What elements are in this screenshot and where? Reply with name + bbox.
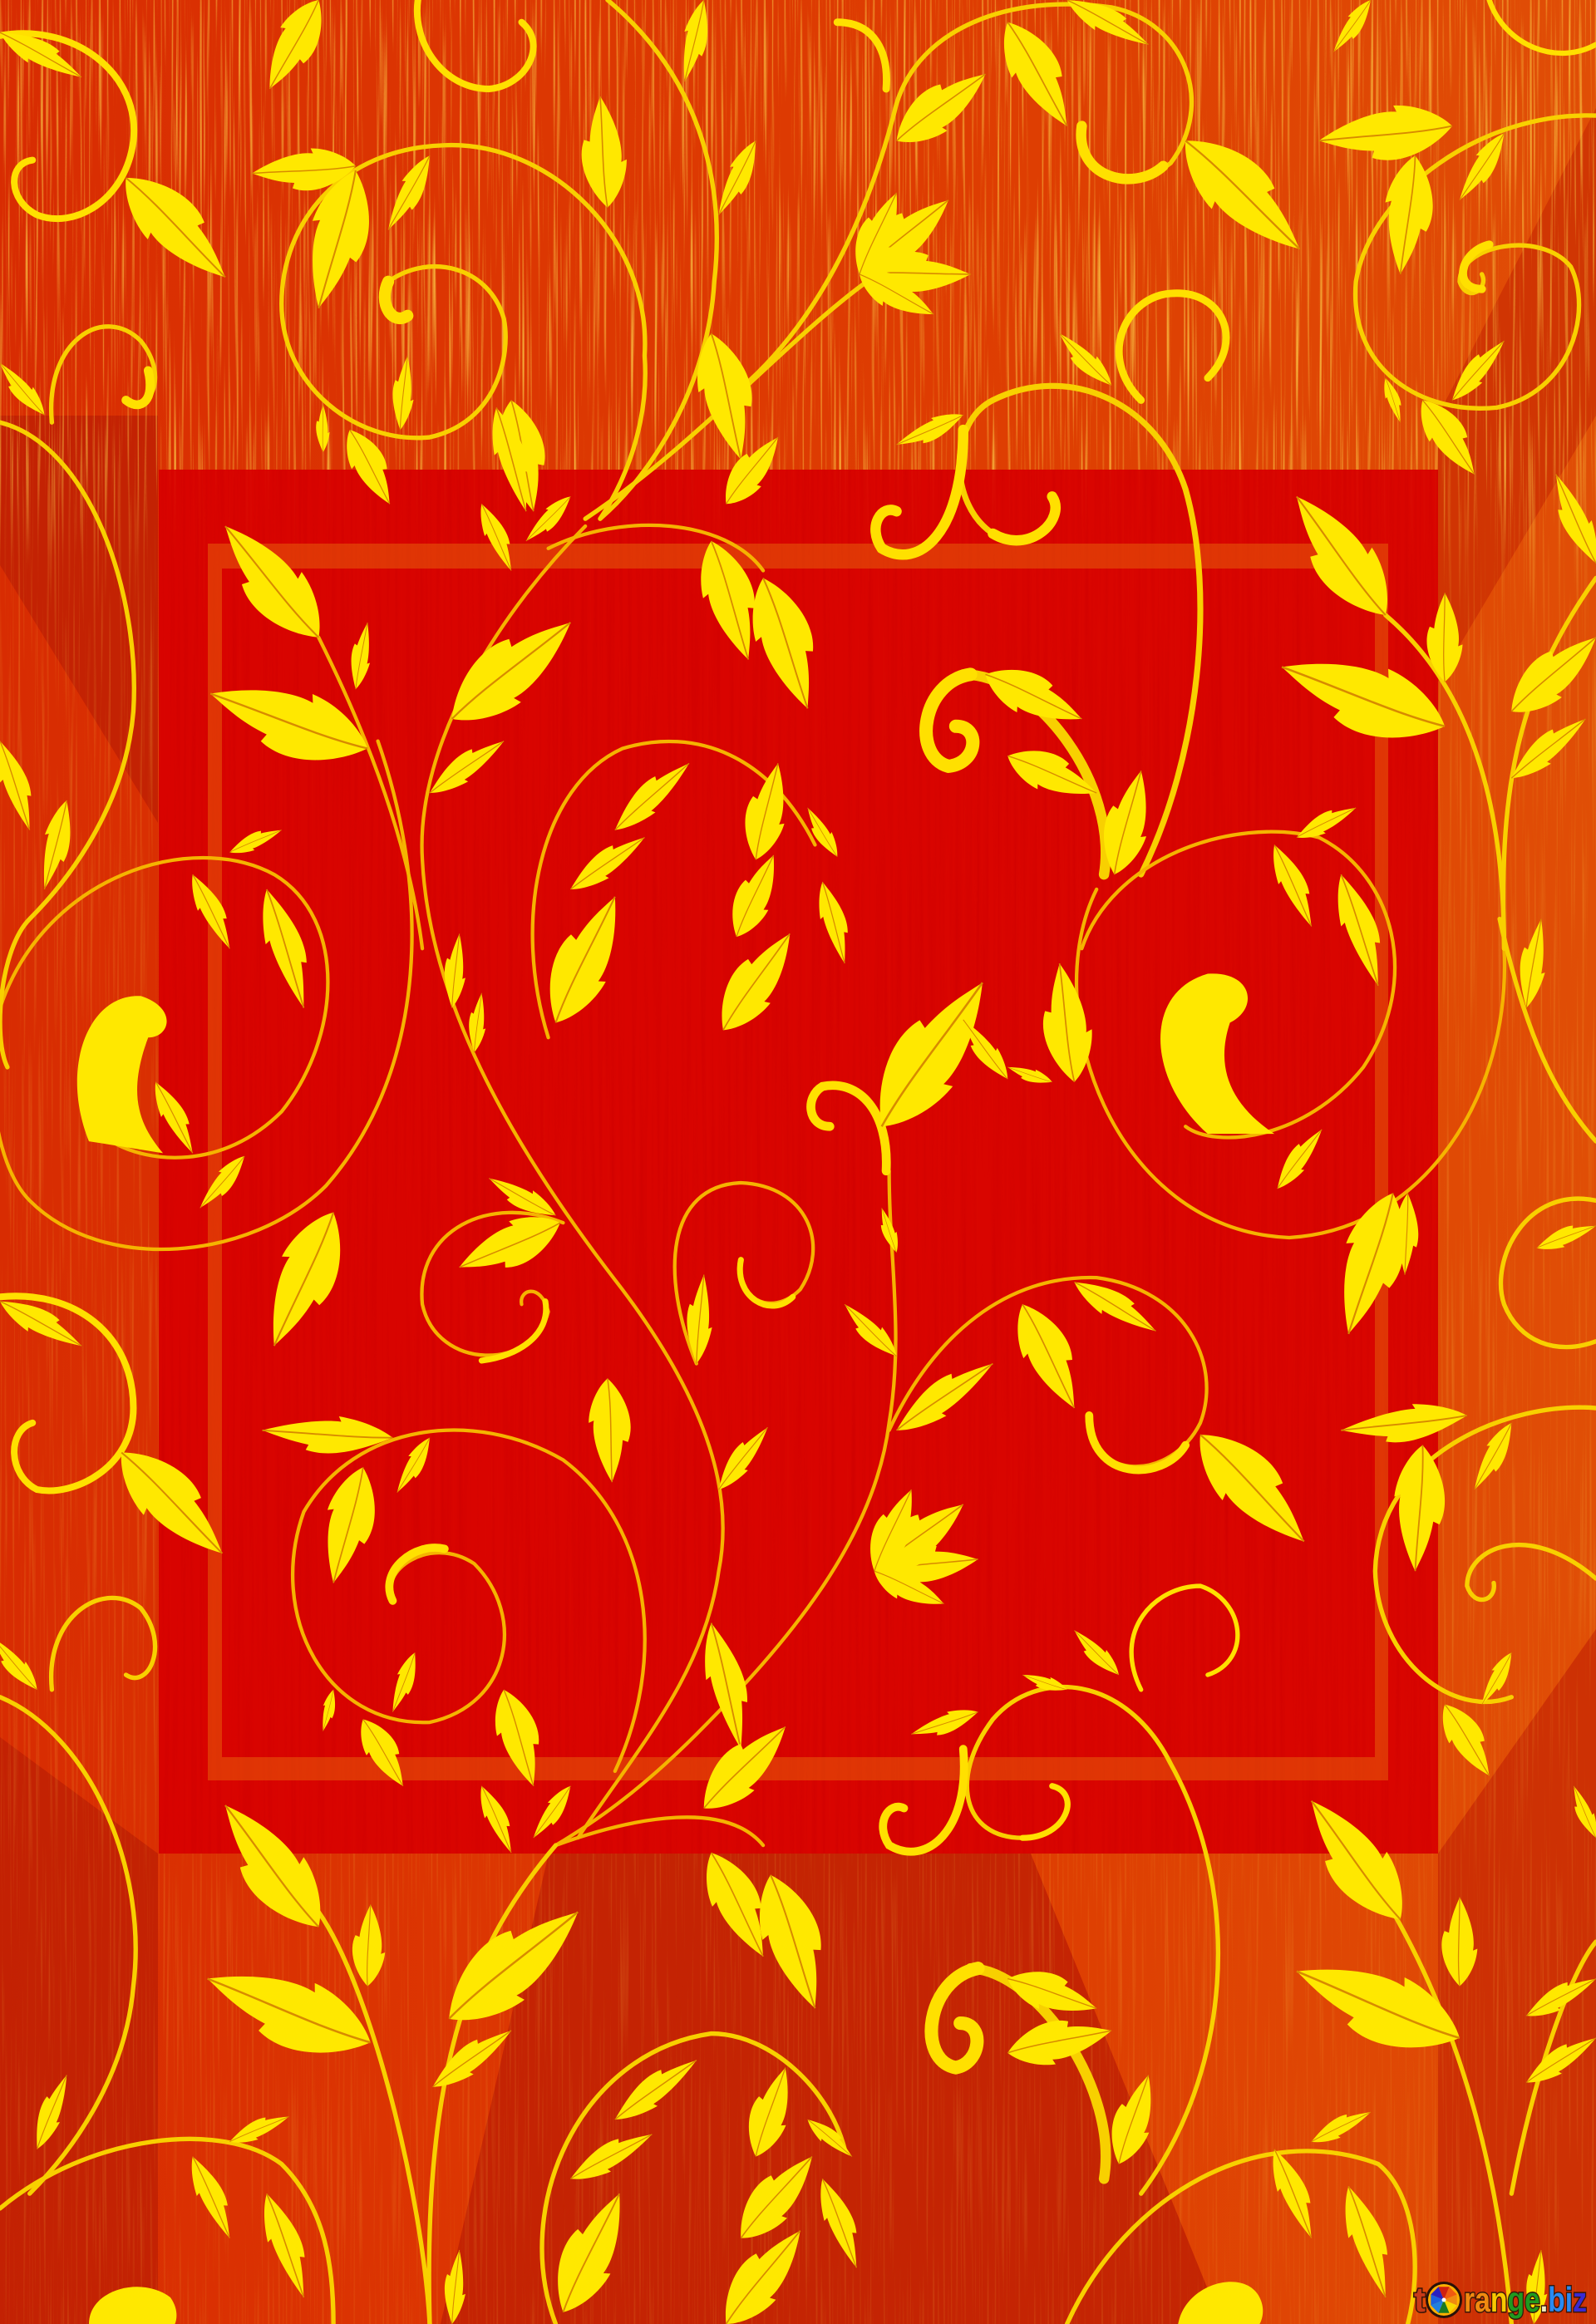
watermark text: t <box>1414 2280 1426 2319</box>
big upper-left spiral <box>250 95 645 519</box>
top scroll <box>252 0 534 99</box>
lower-left circle spiral <box>261 1377 645 1794</box>
bottom-right arc <box>1067 2103 1415 2324</box>
watermark text: range.biz: range.biz <box>1464 2280 1587 2319</box>
flower: upper <box>843 182 971 329</box>
top-right spiral <box>1316 0 1596 485</box>
central upper stems <box>472 0 1322 717</box>
left circle scroll <box>0 822 361 1358</box>
panel: dark weave texture <box>159 470 1438 1854</box>
lower center leaves and arc <box>472 1618 842 2017</box>
panel: central red square <box>159 470 1438 1854</box>
bottom-left arc <box>0 2070 333 2324</box>
acanthus scroll: middle right <box>926 655 1162 880</box>
small center curls <box>421 1169 813 1496</box>
upper-right scrolls <box>875 293 1226 874</box>
main stem and left branch <box>0 508 723 1838</box>
left edge vine <box>0 327 155 1067</box>
lower-right scrolls <box>883 1586 1238 2194</box>
bottom center swirl <box>539 2034 869 2324</box>
panel: inner frame band <box>208 544 1388 1780</box>
acanthus scroll: bottom <box>931 1961 1166 2179</box>
right circle spiral <box>1006 799 1505 1343</box>
bottom stem and left branch <box>195 1786 599 2324</box>
bottom-right branch <box>1283 1783 1596 2324</box>
left lower scrolls <box>0 1289 243 2194</box>
icon: orange wheel <box>1426 2282 1462 2318</box>
top-left scroll <box>0 21 245 297</box>
right edge lower scrolls <box>1339 1199 1596 1785</box>
right edge upper branch <box>1270 469 1596 1141</box>
watermark: torange.biz <box>1414 2280 1587 2319</box>
center stem and right scroll <box>556 963 1326 1845</box>
flower: lower <box>858 1482 980 1617</box>
center swirl with leaves <box>530 741 857 1043</box>
